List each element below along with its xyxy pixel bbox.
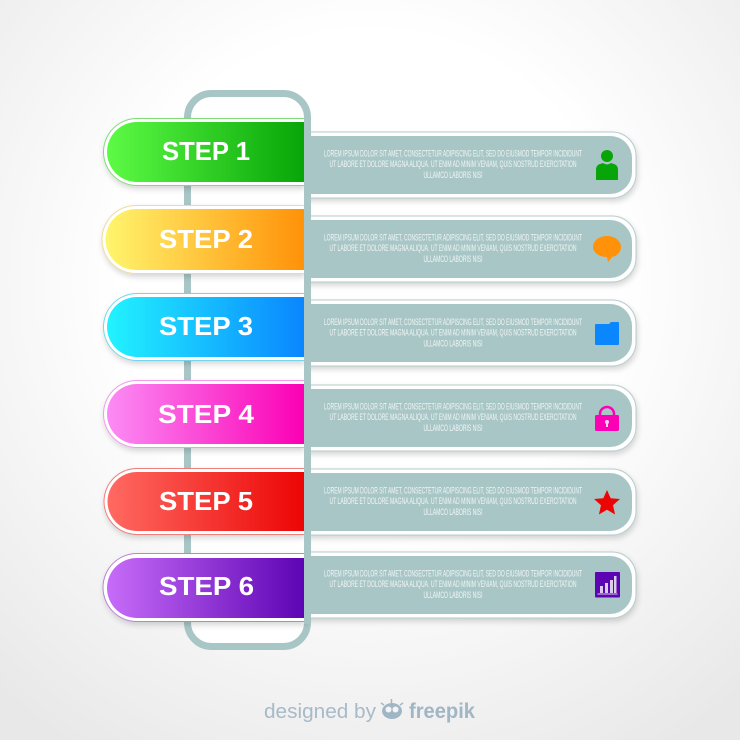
pill: step 3: [103, 293, 304, 361]
footer: freepik credit: freepik: [409, 700, 475, 723]
panel: step 1 description: [300, 132, 636, 198]
icon: padlock: [595, 407, 619, 431]
pill: step 2: [102, 205, 304, 274]
label: step 3: STEP 3: [159, 311, 253, 341]
footer: freepik credit: [264, 699, 475, 723]
text: step 1 description: ULLAMCO LABORIS NISI: [424, 169, 482, 180]
text: step 5 description: ULLAMCO LABORIS NISI: [424, 506, 482, 517]
label: step 1: STEP 1: [162, 136, 250, 166]
icon: bar chart: [595, 572, 620, 598]
text: step 2 description: ULLAMCO LABORIS NISI: [424, 253, 482, 264]
panel: step 6 description: [300, 552, 636, 618]
label: step 4: STEP 4: [158, 399, 255, 429]
icon: folder: [595, 322, 619, 345]
panel: step 2 description: [300, 216, 636, 282]
text: step 6 description: ULLAMCO LABORIS NISI: [424, 589, 482, 600]
pill: step 5: [103, 468, 304, 535]
rear frame: [188, 94, 308, 646]
panel: step 5 description: [300, 469, 636, 535]
label: step 5: STEP 5: [159, 486, 253, 516]
pill: step 6: [102, 553, 304, 622]
text: step 3 description: ULLAMCO LABORIS NISI: [424, 338, 482, 348]
frame right bar: [304, 116, 311, 624]
text: step 4 description: ULLAMCO LABORIS NISI: [424, 422, 482, 433]
panel: step 4 description: [300, 385, 636, 451]
label: step 6: STEP 6: [159, 571, 254, 601]
label: step 2: STEP 2: [159, 224, 253, 254]
icon: freepik mascot: [381, 699, 403, 719]
icon: speech bubble: [593, 236, 621, 262]
pill: step 1: [103, 118, 304, 186]
panel: step 3 description: [300, 300, 636, 366]
pill: step 4: [103, 380, 304, 448]
icon: star: [594, 490, 620, 514]
footer: freepik credit: designed by: [264, 701, 376, 723]
icon: person: [596, 150, 618, 180]
